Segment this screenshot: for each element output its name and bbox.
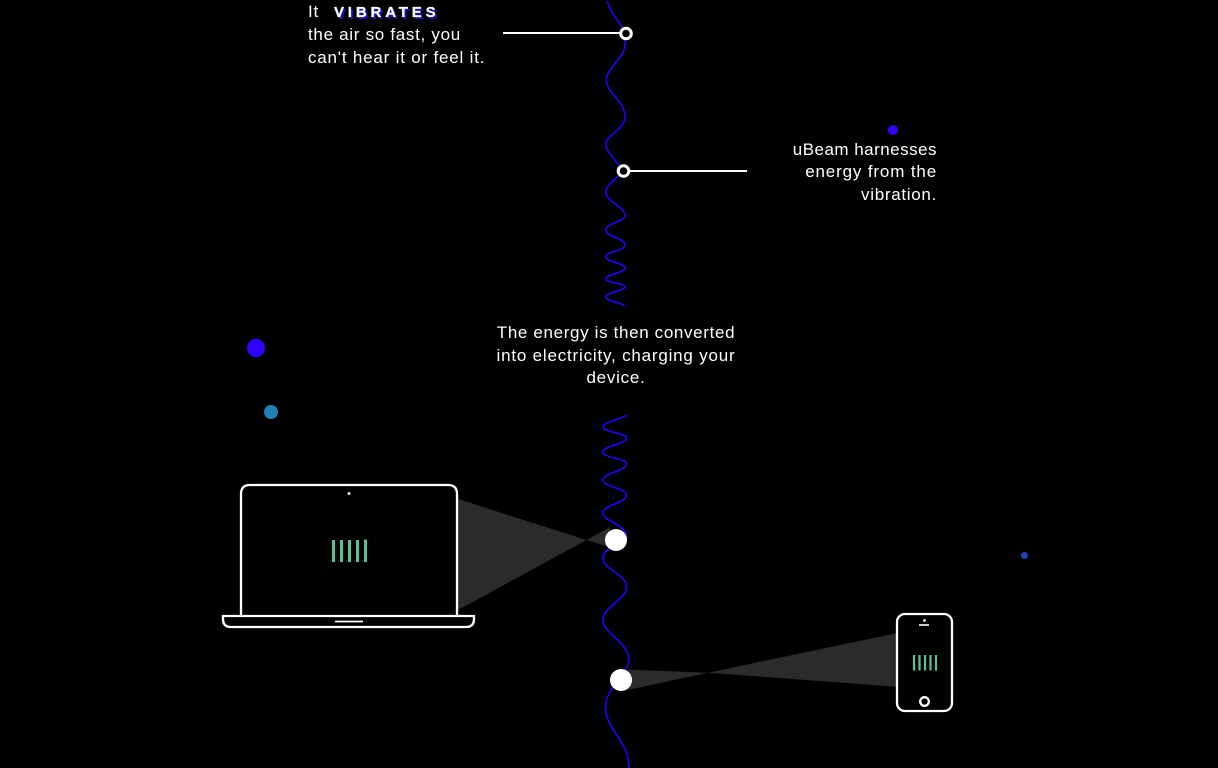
text: uBeam harnesses energy: vibration. bbox=[861, 185, 937, 204]
text: it vibrates the air: It VIBRATES bbox=[308, 2, 439, 21]
decorative dot: small violet bbox=[888, 125, 898, 135]
icon: laptop bbox=[223, 485, 474, 627]
icon: phone bbox=[897, 614, 952, 711]
phone charge bars bbox=[914, 655, 936, 670]
node: phone bbox=[610, 669, 632, 691]
decorative dot: large violet bbox=[247, 339, 265, 357]
decorative dot: teal blue bbox=[264, 405, 278, 419]
laptop charge bars bbox=[334, 540, 366, 562]
text: uBeam harnesses energy: uBeam harnesses bbox=[793, 140, 937, 159]
text: energy converted to electricity: device. bbox=[586, 368, 646, 387]
connector: vibrates bbox=[503, 28, 631, 39]
text: energy converted to electricity: The energy is then converted bbox=[497, 323, 735, 342]
text: it vibrates the air bbox=[308, 2, 485, 67]
sound wave: upper segment bbox=[606, 1, 625, 306]
connector: harnesses bbox=[618, 166, 747, 176]
beam: laptop bbox=[458, 499, 610, 610]
text: it vibrates the air: can't hear it or feel it. bbox=[308, 48, 485, 67]
text: it vibrates the air: the air so fast, you bbox=[308, 25, 461, 44]
node: laptop bbox=[605, 529, 627, 551]
sound wave: lower segment bbox=[603, 415, 629, 768]
text: energy converted to electricity bbox=[497, 323, 735, 387]
decorative dot: small blue bbox=[1021, 552, 1028, 559]
text: uBeam harnesses energy: energy from the bbox=[805, 162, 937, 181]
text: uBeam harnesses energy bbox=[793, 140, 937, 204]
beam: phone bbox=[625, 633, 896, 690]
text: energy converted to electricity: into electricity, charging your bbox=[497, 346, 735, 365]
